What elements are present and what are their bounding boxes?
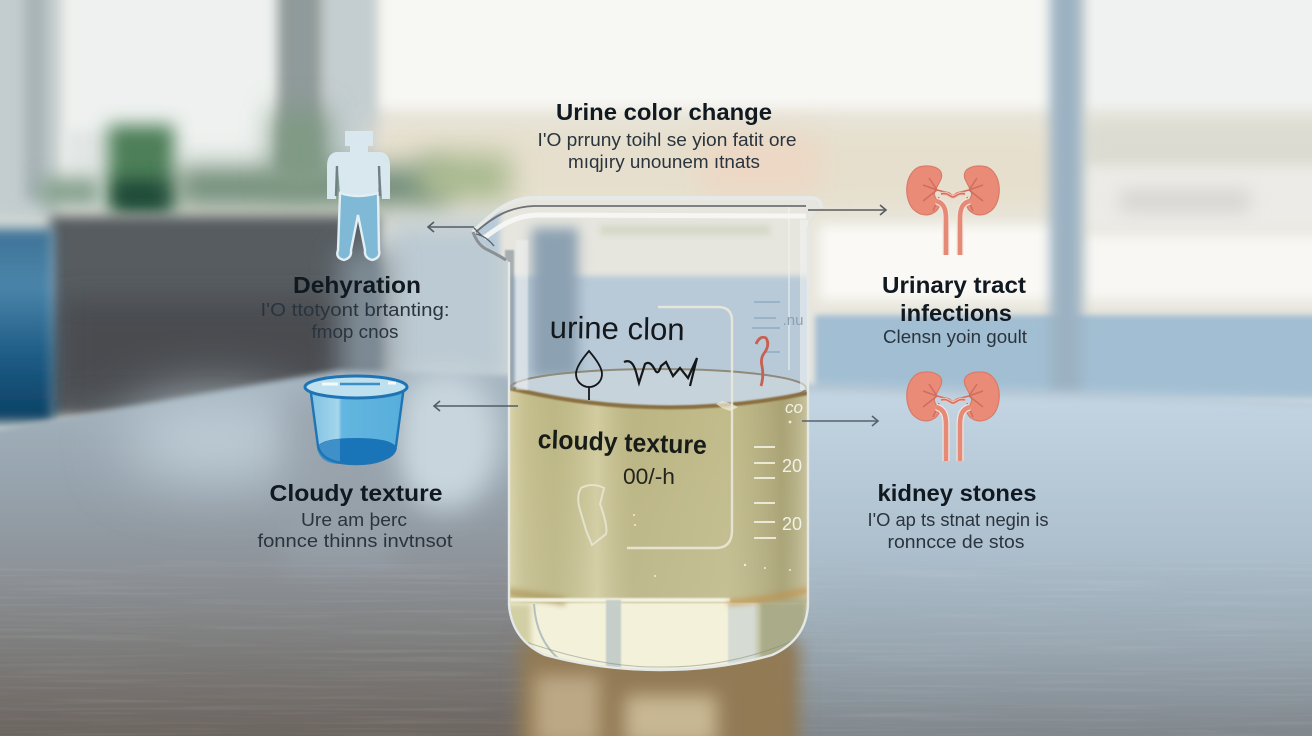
scale marks <box>754 447 776 538</box>
scale numbers <box>782 398 803 534</box>
icon: blue cup <box>305 376 407 464</box>
text: dehydration: I'O ttotyont brtanting: <box>260 299 450 320</box>
heading block: urine color change: mıqjıry unounem ıtnats <box>568 151 760 172</box>
heading block: urine color change <box>538 99 796 172</box>
arrow: to dehydration <box>428 222 474 232</box>
beaker reflection <box>518 640 800 736</box>
text: urinary tract infections <box>882 272 1027 347</box>
text: kidney stones: kidney stones <box>878 480 1036 506</box>
wooden table <box>0 370 1312 736</box>
label: cloudy texture: cloudy texture <box>537 424 707 460</box>
label: 00/h: 00/-h <box>623 464 675 489</box>
text: dehydration: fmop cnos <box>312 321 398 342</box>
wall shading <box>505 250 514 390</box>
beaker <box>460 190 830 690</box>
arrow: to kidney stones <box>802 416 878 426</box>
icon: red question mark <box>756 337 768 386</box>
glass outline and rim <box>509 226 808 670</box>
plants <box>108 125 174 210</box>
liquid surface <box>510 369 806 407</box>
text: urinary tract infections: infections <box>900 300 1012 326</box>
arrow: to urinary tract infections <box>808 205 886 215</box>
left window <box>60 0 280 170</box>
text: cloudy texture <box>258 480 452 551</box>
cabinet <box>50 216 380 416</box>
scale numbers: 20 <box>782 514 802 534</box>
text: cloudy texture: fonnce thinns invtnsot <box>258 530 452 551</box>
text: urinary tract infections: Clensn yoin goult <box>883 326 1027 347</box>
icon: human figure <box>327 131 390 260</box>
text: cloudy texture: Ure am þerc <box>301 509 407 530</box>
small scale text: .nu <box>783 312 803 329</box>
arrow: to cloudy texture <box>434 401 518 411</box>
text: kidney stones: ronncce de stos <box>888 531 1024 552</box>
icon: kidneys (upper) <box>907 166 999 255</box>
scale numbers: co <box>785 398 803 417</box>
icon: droplet <box>576 351 602 400</box>
text: cloudy texture: Cloudy texture <box>270 480 442 506</box>
scale numbers: 20 <box>782 456 802 476</box>
printed label frame <box>627 307 732 548</box>
text: kidney stones <box>868 480 1048 552</box>
text: dehydration <box>260 272 450 342</box>
text: urinary tract infections: Urinary tract <box>882 272 1026 298</box>
bubbles <box>633 401 791 577</box>
clear upper glass <box>475 200 819 669</box>
icon: kidneys (lower) <box>907 372 999 461</box>
text: dehydration: Dehyration <box>293 272 421 298</box>
heading block: urine color change: Urine color change <box>556 99 772 125</box>
label: urine clon: urine clon <box>549 310 685 347</box>
scribble mark <box>624 358 697 386</box>
urine liquid <box>510 390 807 604</box>
sketch mark <box>578 485 606 545</box>
text: kidney stones: I'O ap ts stnat negin is <box>868 509 1048 530</box>
pale bottom of liquid <box>510 602 807 669</box>
heading block: urine color change: I'O prruny toihl se yion fatit ore <box>538 129 796 150</box>
top middle and right window <box>380 0 1060 110</box>
